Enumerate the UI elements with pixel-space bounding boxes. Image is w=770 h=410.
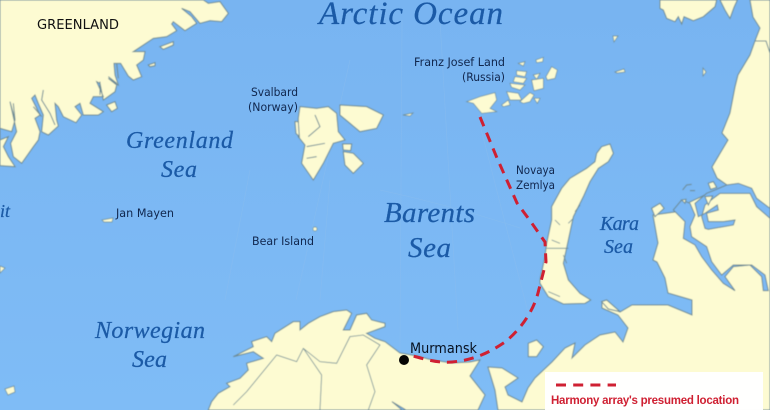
land: Scandinavia and Kola xyxy=(208,310,485,410)
land: Russian mainland xyxy=(488,0,770,410)
label: Novaya Zemlya: Zemlya xyxy=(516,178,555,192)
label: Svalbard: (Norway) xyxy=(248,100,298,114)
land: top right islands xyxy=(660,0,737,24)
legend xyxy=(545,372,763,410)
label: Kara Sea: Sea xyxy=(604,236,633,258)
label: Denmark Strait fragment: it xyxy=(0,201,11,221)
legend dashes xyxy=(556,384,616,386)
land: Novaya Zemlya xyxy=(540,144,613,304)
label: Norwegian Sea xyxy=(94,318,205,373)
label: Franz Josef Land xyxy=(414,55,505,84)
label: Franz Josef Land: (Russia) xyxy=(462,70,505,84)
label: Greenland Sea xyxy=(126,128,234,183)
label: Murmansk: Murmansk xyxy=(410,341,478,357)
label: Norwegian Sea: Sea xyxy=(132,347,167,373)
land: Vaygach and Kolguyev Island xyxy=(528,300,620,357)
water: Ob and Gydan gulfs xyxy=(652,182,770,291)
label: Greenland Sea: Sea xyxy=(161,157,197,183)
Murmansk marker xyxy=(399,355,409,365)
label: Greenland Sea: Greenland xyxy=(126,128,234,154)
label: Kara Sea: Kara xyxy=(599,213,639,235)
land: Franz Josef Land xyxy=(467,57,557,113)
label: Barents Sea: Sea xyxy=(408,232,451,264)
label: Barents Sea: Barents xyxy=(384,197,475,229)
label: Bear Island: Bear Island xyxy=(252,234,314,248)
legend text: Harmony array's presumed location xyxy=(551,395,739,407)
sea labels xyxy=(0,0,639,373)
label: Barents Sea xyxy=(384,197,475,264)
label: Svalbard xyxy=(248,85,298,114)
place labels xyxy=(37,18,555,357)
label: Greenland: GREENLAND xyxy=(37,18,119,33)
land: Greenland xyxy=(0,0,228,167)
label: Kara Sea xyxy=(599,213,639,258)
label: Norwegian Sea: Norwegian xyxy=(94,318,205,344)
label: Svalbard: Svalbard xyxy=(251,85,298,99)
label: Novaya Zemlya: Novaya xyxy=(516,163,555,177)
label: Franz Josef Land: Franz Josef Land xyxy=(414,55,505,69)
label: Novaya Zemlya xyxy=(516,163,555,192)
red dashed line: Harmony array location xyxy=(413,117,546,362)
label: Jan Mayen: Jan Mayen xyxy=(115,206,174,220)
land: Svalbard xyxy=(295,105,383,180)
